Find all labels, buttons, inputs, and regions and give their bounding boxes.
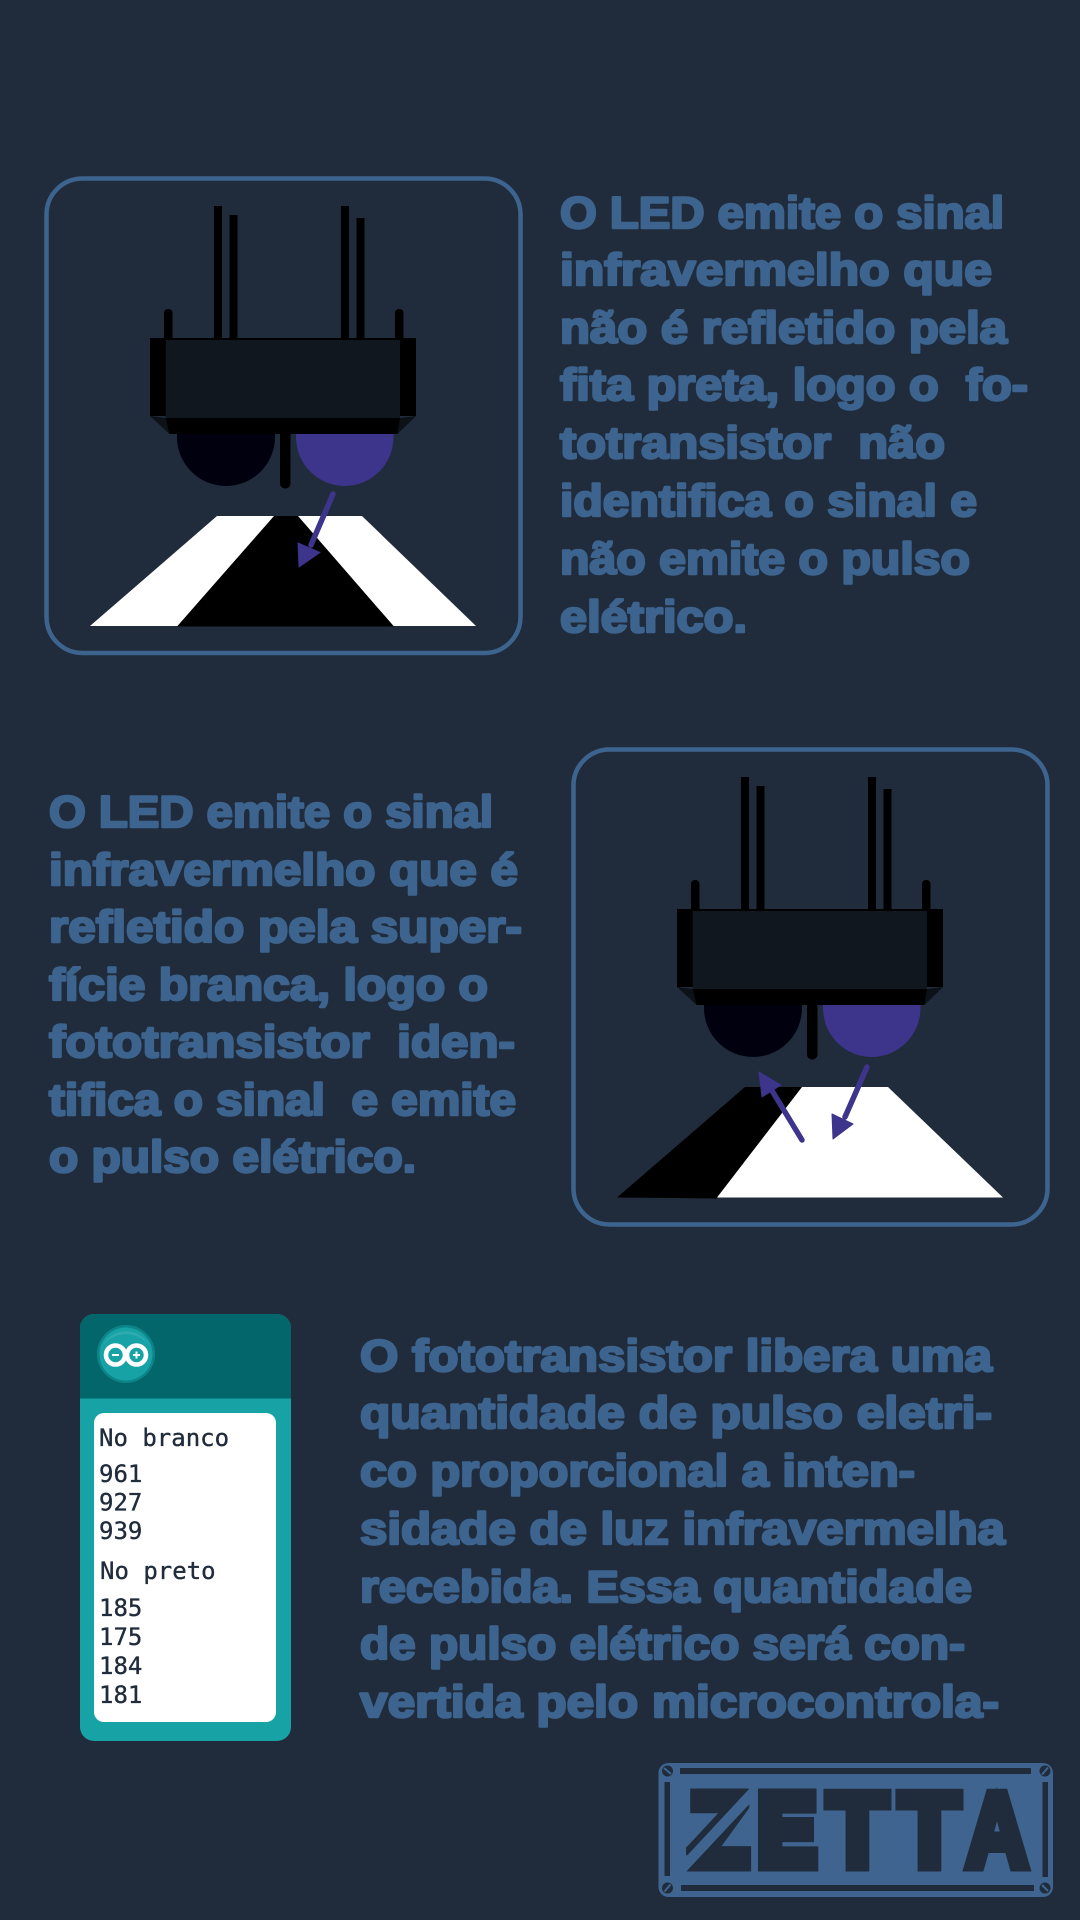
card header — [80, 1314, 291, 1398]
text block: second explanation: fototransistor iden- — [49, 1018, 515, 1067]
serial output panel — [94, 1413, 276, 1722]
plate screws — [662, 1766, 1050, 1894]
text block: second explanation — [49, 788, 522, 1182]
text block: first explanation: identifica o sinal e — [560, 477, 977, 526]
text block: first explanation: fita preta, logo o fo- — [560, 361, 1028, 410]
plate — [658, 1763, 1053, 1897]
logo: Zetta plate — [658, 1763, 1053, 1897]
panel: sensor over white surface — [574, 750, 1048, 1224]
arrow: reflected signal — [759, 1072, 802, 1140]
text block: third explanation: de pulso elétrico será con- — [360, 1620, 965, 1669]
wordmark: T — [899, 1771, 960, 1889]
card body — [80, 1314, 291, 1741]
arrow: emitted signal — [832, 1067, 867, 1139]
text block: second explanation: tifica o sinal e emite — [49, 1076, 516, 1125]
wordmark: Z — [690, 1776, 747, 1886]
text block: first explanation: O LED emite o sinal — [560, 189, 1004, 238]
serial readings: white surface — [99, 1424, 229, 1545]
text block: third explanation: quantidade de pulso eletri- — [360, 1389, 992, 1438]
serial readings: white surface: 927 — [99, 1488, 142, 1516]
wordmark: E — [758, 1775, 816, 1886]
wordmark — [686, 1771, 1028, 1890]
plate slots — [664, 1768, 1048, 1891]
text block: first explanation: totransistor não — [560, 419, 945, 468]
arrow: emitted signal — [298, 494, 333, 567]
text block: third explanation: vertida pelo microcontrola- — [360, 1678, 999, 1727]
serial readings: black tape — [99, 1557, 216, 1709]
serial readings: white surface: 961 — [99, 1460, 142, 1488]
text block: third explanation: recebida. Essa quantidade — [360, 1563, 972, 1612]
text block: second explanation: o pulso elétrico. — [49, 1133, 416, 1182]
icon: Arduino logo — [97, 1325, 155, 1383]
text block: third explanation: sidade de luz infravermelha — [360, 1505, 1006, 1554]
text block: first explanation: elétrico. — [560, 593, 747, 642]
icon: IR sensor — [150, 206, 416, 488]
icon: IR sensor — [677, 777, 943, 1060]
text block: third explanation — [360, 1332, 1006, 1727]
wordmark: T — [827, 1771, 888, 1889]
serial readings: white surface: No branco — [99, 1424, 229, 1452]
icon: road with white surface — [617, 1087, 1003, 1198]
text block: first explanation: não é refletido pela — [560, 304, 1008, 353]
panel: Arduino serial monitor — [80, 1314, 291, 1741]
text block: first explanation: infravermelho que — [560, 246, 992, 295]
icon: road with black tape — [90, 516, 476, 626]
serial readings: black tape: 185 — [99, 1594, 142, 1622]
serial readings: black tape: 175 — [99, 1623, 142, 1651]
serial readings: black tape: No preto — [100, 1557, 216, 1585]
text block: third explanation: O fototransistor libera uma — [360, 1332, 993, 1381]
panel frame — [574, 750, 1048, 1224]
text block: second explanation: infravermelho que é — [49, 846, 518, 895]
panel: sensor over black tape — [46, 178, 520, 653]
wordmark: A — [966, 1772, 1028, 1890]
panel frame — [46, 178, 520, 653]
text block: first explanation — [560, 189, 1028, 642]
text block: third explanation: co proporcional a inten- — [360, 1447, 915, 1496]
text block: second explanation: O LED emite o sinal — [49, 788, 493, 837]
text block: first explanation: não emite o pulso — [560, 535, 970, 584]
text block: second explanation: refletido pela super- — [49, 903, 522, 952]
text block: second explanation: fície branca, logo o — [49, 961, 488, 1010]
serial readings: black tape: 184 — [99, 1652, 142, 1680]
serial readings: white surface: 939 — [99, 1517, 142, 1545]
serial readings: black tape: 181 — [99, 1681, 142, 1709]
